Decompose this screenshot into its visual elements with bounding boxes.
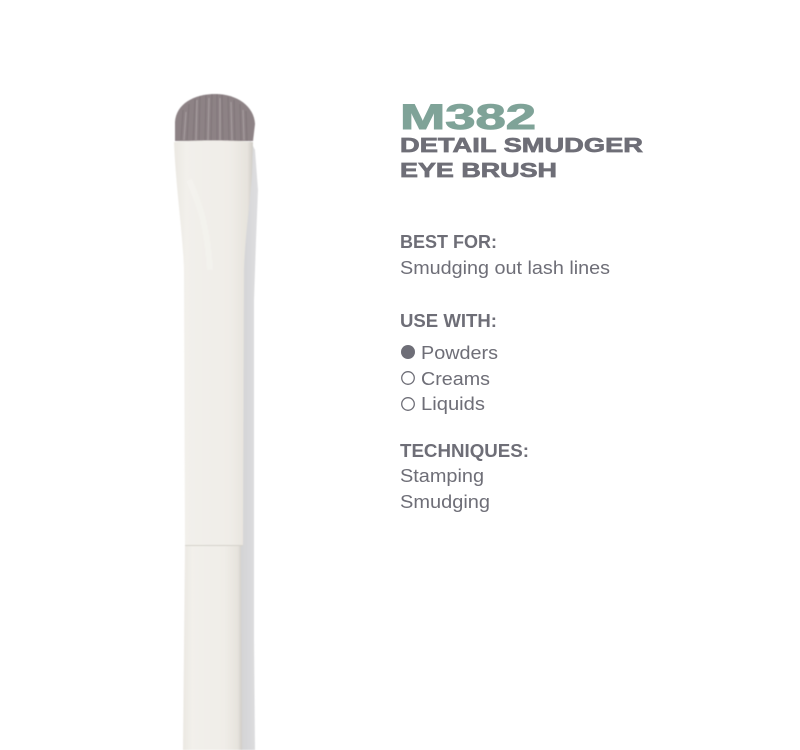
bristles <box>175 94 255 141</box>
icon: empty bullet <box>402 372 414 384</box>
text block: use with <box>400 310 498 414</box>
text block: best for <box>400 231 610 278</box>
icon: filled bullet <box>401 345 415 359</box>
text block: best for: Smudging out lash lines <box>400 257 610 278</box>
icon: eye brush <box>174 94 258 750</box>
subtitle <box>400 135 644 182</box>
text block: techniques: Smudging <box>400 491 490 512</box>
text block: techniques <box>400 440 529 512</box>
handle <box>183 546 242 750</box>
subtitle: DETAIL SMUDGER <box>400 135 644 157</box>
ferrule <box>174 140 253 545</box>
text block: techniques: TECHNIQUES: <box>400 440 529 461</box>
subtitle: EYE BRUSH <box>400 160 557 182</box>
text block: best for: BEST FOR: <box>400 231 497 252</box>
text block: use with: Liquids <box>421 393 485 414</box>
text block: techniques: Stamping <box>400 465 484 486</box>
brush shadow <box>236 140 258 750</box>
icon: empty bullet <box>402 398 414 410</box>
text block: use with: Creams <box>421 368 490 389</box>
text block: use with: USE WITH: <box>400 310 497 331</box>
text block: use with: Powders <box>421 342 498 363</box>
title: M382: M382 <box>400 98 536 137</box>
ferrule highlight <box>189 180 210 270</box>
